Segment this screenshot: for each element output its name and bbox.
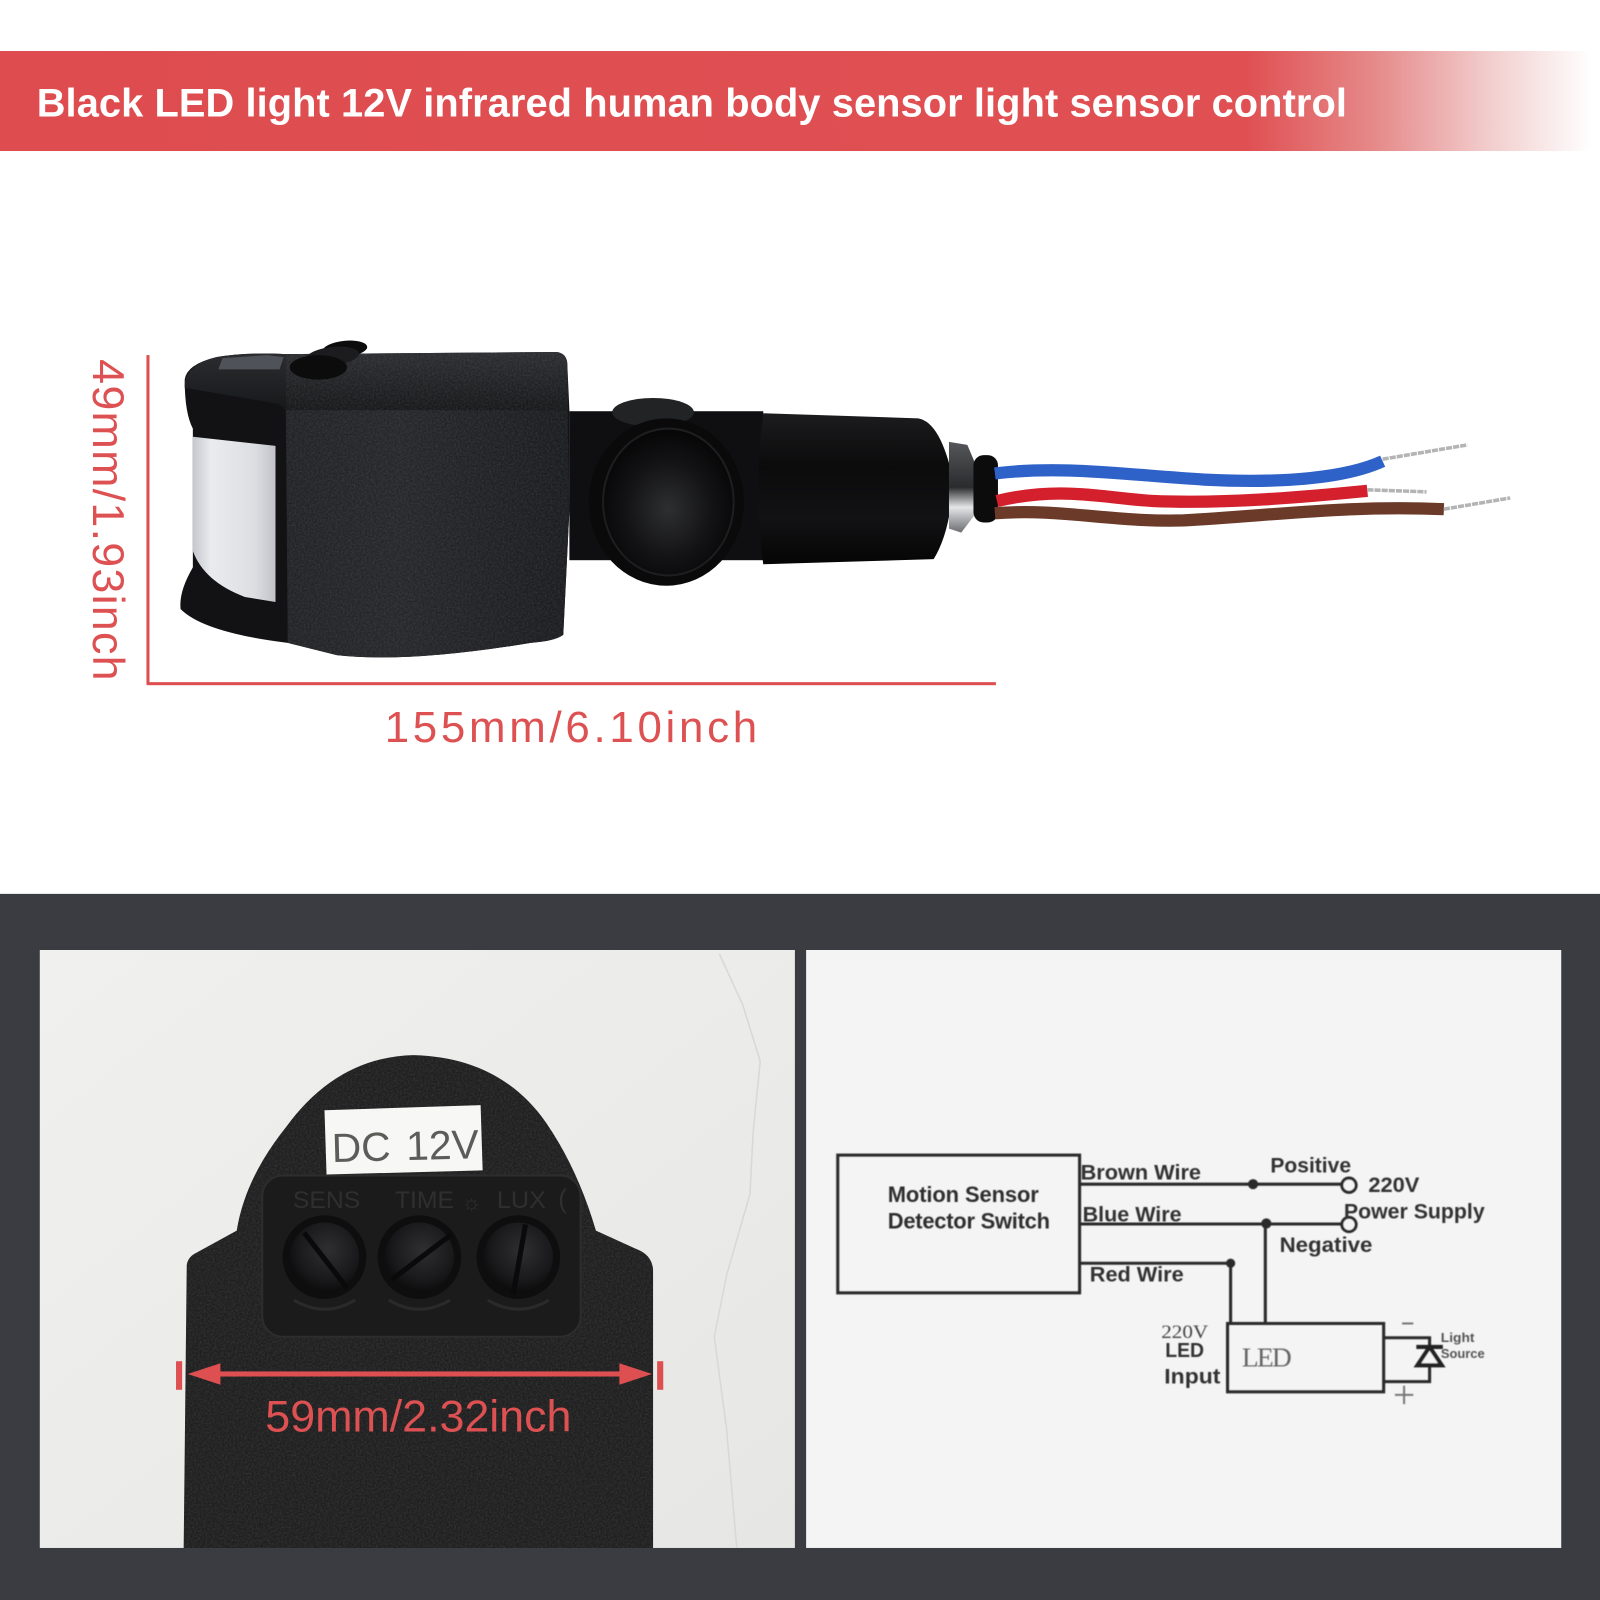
swivel ball — [603, 429, 734, 576]
wire labels: Brown Wire — [1081, 1161, 1201, 1185]
wire labels: Power Supply — [1344, 1199, 1485, 1223]
diagram contents — [838, 1153, 1485, 1404]
wall background — [40, 950, 795, 1548]
device grain — [184, 1055, 653, 1548]
wires — [1080, 1184, 1342, 1323]
device back silhouette — [184, 1055, 653, 1548]
sensor lens — [193, 437, 276, 602]
DC 12V label — [324, 1105, 483, 1174]
SENS dial — [283, 1215, 366, 1309]
housing silhouette — [180, 352, 569, 657]
control labels — [293, 1184, 567, 1215]
sensor box label: Detector Switch — [888, 1209, 1050, 1234]
sensor box label — [888, 1182, 1050, 1234]
polarity marks — [1395, 1323, 1413, 1404]
title banner — [0, 51, 1600, 151]
sensor box — [838, 1155, 1080, 1293]
cylinder — [758, 413, 953, 564]
light source label: Source — [1441, 1346, 1485, 1361]
dark lower section — [0, 894, 1600, 1600]
bare copper strands — [1367, 445, 1510, 509]
panel: wiring diagram — [806, 950, 1561, 1548]
wire labels: Negative — [1280, 1233, 1373, 1257]
wire labels: Positive — [1270, 1153, 1351, 1177]
wire labels: LED — [1165, 1340, 1204, 1362]
dimension: height — [83, 355, 149, 685]
control labels: ☼ — [461, 1190, 482, 1215]
control labels: ( — [558, 1184, 567, 1214]
output loop — [1384, 1338, 1430, 1382]
diode — [1416, 1347, 1443, 1365]
swivel bracket — [569, 411, 763, 560]
display window — [218, 355, 284, 369]
dimension: length — [147, 682, 996, 752]
terminals — [1342, 1178, 1356, 1232]
junction dots — [1226, 1179, 1271, 1268]
DC 12V label: DC — [331, 1124, 391, 1171]
light source label — [1441, 1330, 1485, 1361]
LED driver box — [1228, 1323, 1384, 1392]
LED label: LED — [1242, 1341, 1292, 1372]
housing grain — [286, 352, 571, 658]
product photo: motion sensor side view — [180, 339, 1510, 658]
wire labels: Red Wire — [1090, 1263, 1184, 1287]
height label: 49mm/1.93inch — [83, 359, 134, 681]
wire labels: 220V — [1368, 1173, 1420, 1197]
length label: 155mm/6.10inch — [385, 703, 757, 752]
control inset — [262, 1176, 581, 1337]
width label: 59mm/2.32inch — [265, 1391, 571, 1442]
thread — [973, 455, 998, 522]
housing body — [286, 408, 569, 657]
wire labels: Blue Wire — [1083, 1202, 1182, 1226]
wire labels — [1081, 1153, 1485, 1389]
wire labels: Input — [1164, 1365, 1220, 1389]
red wire — [997, 491, 1367, 502]
swivel top bump — [612, 398, 694, 427]
top dial knobs — [290, 339, 368, 380]
sensor box label: Motion Sensor — [888, 1182, 1039, 1207]
input voltage label: 220V — [1161, 1322, 1208, 1343]
hex nut — [949, 442, 976, 533]
blue wire — [995, 461, 1383, 481]
control labels: LUX — [497, 1187, 546, 1214]
DC 12V label: 12V — [406, 1121, 480, 1169]
wall crack — [714, 954, 760, 1548]
control labels: SENS — [293, 1187, 360, 1214]
width arrow — [176, 1361, 663, 1390]
top cap — [185, 352, 568, 410]
LUX dial — [477, 1215, 560, 1309]
light source label: Light — [1441, 1330, 1475, 1345]
brown wire — [995, 508, 1444, 521]
panel: dial close-up — [40, 950, 795, 1548]
TIME dial — [378, 1215, 461, 1309]
title: Black LED light 12V infrared human body sensor light sensor control — [37, 81, 1347, 125]
swivel joint — [589, 418, 744, 586]
control labels: TIME — [395, 1187, 454, 1214]
